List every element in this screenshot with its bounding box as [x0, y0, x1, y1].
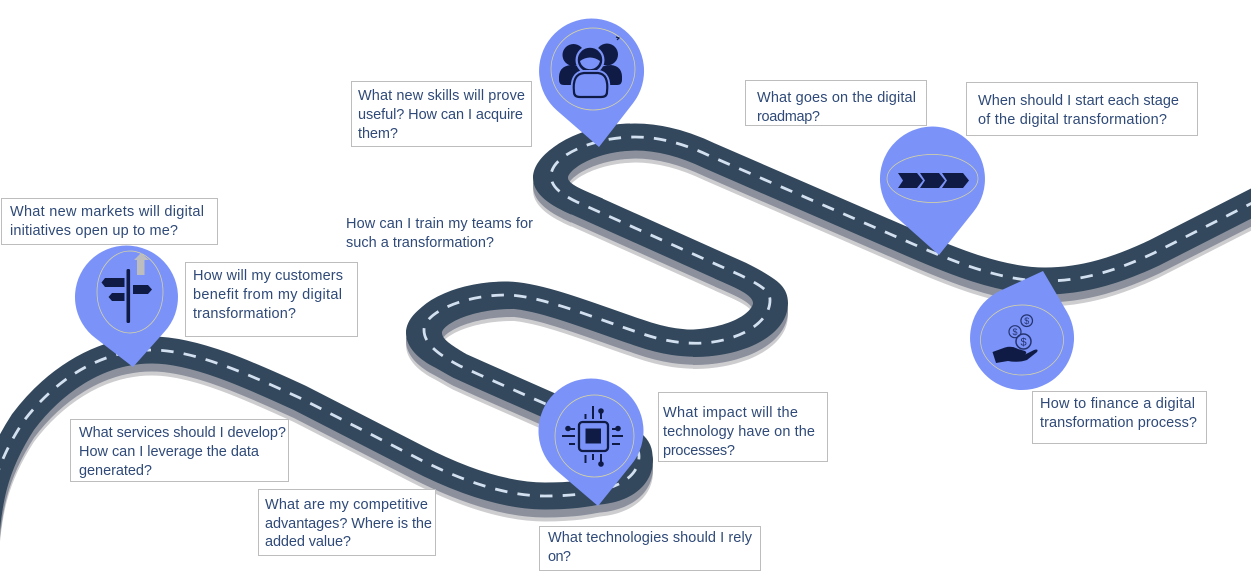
- callout: new markets: initiatives open up to me?: [10, 223, 178, 239]
- pin: finance: [970, 271, 1074, 390]
- callout: financing: How to finance a digital: [1040, 396, 1195, 412]
- icon: hand with coins: $: [1020, 336, 1027, 348]
- callout: technology impact: processes?: [663, 443, 735, 459]
- callout: new skills: What new skills will prove: [358, 88, 525, 104]
- icon: microchip: [562, 406, 623, 467]
- pin: people: [539, 18, 644, 147]
- callout: competitive advantages: What are my competitive: [265, 497, 428, 513]
- callout: services: How can I leverage the data: [79, 444, 260, 460]
- callout: technologies: on?: [548, 549, 571, 565]
- callout: competitive advantages: advantages? Where is the: [265, 516, 432, 532]
- icon: hand with coins: $: [1024, 316, 1029, 326]
- icon: hand with coins: $: [1012, 327, 1018, 337]
- callout: technologies: What technologies should I rely: [548, 530, 753, 546]
- callout: roadmap: What goes on the digital: [757, 90, 916, 106]
- callout: competitive advantages: added value?: [265, 534, 351, 550]
- icon: signpost: [102, 253, 152, 323]
- pin: microchip: [538, 378, 643, 506]
- pin: chevrons: [880, 127, 985, 255]
- callout: customers benefit: transformation?: [193, 306, 296, 322]
- callout: services: What services should I develop?: [79, 425, 286, 441]
- callout: customers benefit: How will my customers: [193, 268, 343, 284]
- callout: technology impact: What impact will the: [663, 405, 798, 421]
- icon: team of people: [559, 37, 622, 97]
- text: training teams: such a transformation?: [346, 235, 494, 251]
- callout: technology impact: technology have on the: [663, 424, 815, 440]
- icon: hand with coins: [992, 315, 1038, 363]
- callout: competitive advantages: [258, 490, 436, 556]
- callout: timing: of the digital transformation?: [978, 112, 1167, 128]
- callout: services: [70, 420, 288, 482]
- text: training teams: [346, 216, 533, 251]
- road with shadow and centre dashes: [0, 124, 1251, 579]
- callout: financing: transformation process?: [1040, 415, 1197, 431]
- callout: timing: When should I start each stage: [978, 93, 1179, 109]
- callout: technology impact: [658, 392, 828, 462]
- callout: services: generated?: [79, 463, 152, 479]
- callout: technologies: [540, 526, 760, 570]
- callout: new markets: [2, 198, 218, 244]
- callout: roadmap: roadmap?: [757, 109, 820, 125]
- callout: new markets: What new markets will digital: [10, 204, 204, 220]
- callout: timing: [966, 82, 1198, 136]
- callout: financing: [1032, 392, 1206, 444]
- callout: roadmap: [746, 80, 926, 126]
- callout: customers benefit: benefit from my digital: [193, 287, 342, 303]
- text: training teams: How can I train my teams for: [346, 216, 533, 232]
- callout: new skills: useful? How can I acquire: [358, 107, 523, 123]
- pin: signpost: [75, 246, 178, 367]
- callout: new skills: [352, 82, 532, 146]
- callout: customers benefit: [186, 262, 358, 336]
- icon: three chevrons: [898, 173, 969, 188]
- callout: new skills: them?: [358, 126, 398, 142]
